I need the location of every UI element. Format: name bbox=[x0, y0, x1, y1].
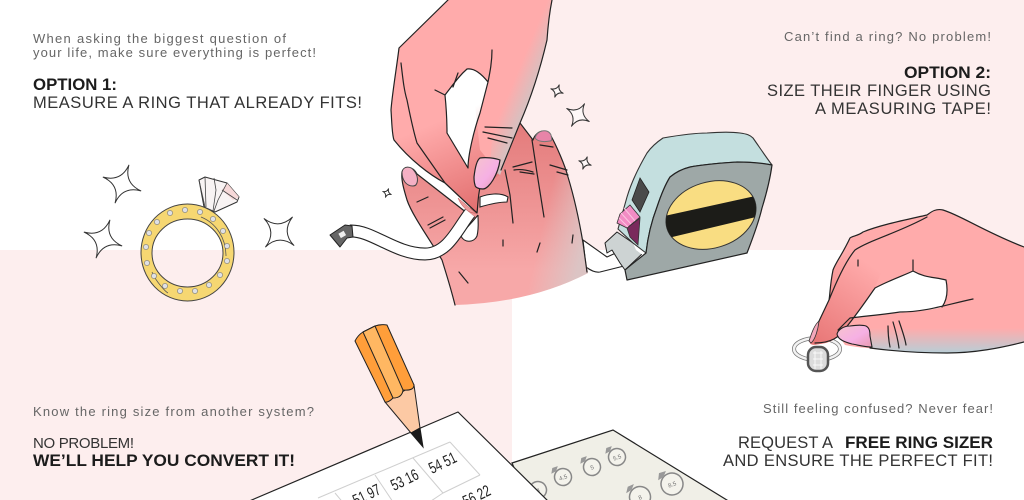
icon: diamond ring with sparkles bbox=[77, 158, 307, 301]
intro text: option 2: Can’t find a ring? No problem! bbox=[784, 29, 991, 44]
tape measure label bbox=[666, 180, 756, 250]
icon: thumb nail bbox=[474, 158, 500, 189]
convert title bbox=[33, 435, 295, 470]
icon: pencil bbox=[355, 325, 423, 447]
heading: option 1 bbox=[33, 31, 362, 112]
option 1 title: MEASURE A RING THAT ALREADY FITS! bbox=[33, 94, 362, 112]
option 2 title: A MEASURING TAPE! bbox=[815, 100, 991, 118]
tape measure white strip bbox=[633, 243, 647, 256]
convert title: WE’LL HELP YOU CONVERT IT! bbox=[33, 452, 295, 470]
intro text: option 1 bbox=[33, 31, 316, 60]
tape measure window bbox=[632, 178, 649, 212]
icon: finger nails bbox=[809, 321, 872, 347]
chart numbers: 54 51 bbox=[425, 448, 460, 477]
icon: tape end between hand and measure bbox=[583, 240, 624, 272]
chart numbers: 53 16 bbox=[387, 465, 422, 494]
hand shape bbox=[810, 210, 1024, 353]
icon: tape measure bbox=[605, 132, 772, 280]
intro text: option 1: When asking the biggest question of bbox=[33, 31, 286, 46]
chart paper bbox=[240, 412, 552, 500]
option 2 title: SIZE THEIR FINGER USING bbox=[767, 82, 991, 100]
icon: index fingernail bbox=[458, 198, 476, 213]
tape measure grey side bbox=[625, 162, 772, 280]
pinky and ring finger nails bbox=[402, 131, 552, 186]
sheet ring sizes: 5.5 bbox=[613, 454, 623, 463]
finger and knuckle creases bbox=[417, 140, 573, 283]
tape lock button bbox=[617, 205, 640, 245]
option 1 title bbox=[33, 76, 362, 112]
sheet paper bbox=[512, 430, 735, 500]
upper hand outline bbox=[391, 0, 552, 213]
ring stones bbox=[143, 207, 230, 294]
intro text: convert: Know the ring size from another system? bbox=[33, 404, 314, 419]
chart grid bbox=[318, 442, 480, 500]
tape ribbon bbox=[350, 194, 508, 254]
chart numbers bbox=[349, 448, 494, 500]
sheet ring sizes: 4 bbox=[536, 488, 542, 495]
icon: sparkles around ring bbox=[77, 158, 307, 265]
heading: convert bbox=[33, 404, 314, 470]
heading: ring sizer bbox=[723, 401, 993, 470]
metal tape tip bbox=[330, 225, 353, 247]
icon: diamond bbox=[199, 177, 239, 212]
illustration: hand with spread fingers bbox=[402, 123, 588, 305]
sheet ring sizes: 5 bbox=[590, 465, 596, 472]
ring sizer title: FREE RING SIZER bbox=[845, 434, 993, 452]
ring sizer title bbox=[723, 434, 993, 470]
option 1 title: OPTION 1: bbox=[33, 76, 117, 94]
option 2 title: OPTION 2: bbox=[904, 64, 991, 82]
upper hand shape bbox=[391, 0, 552, 213]
intro text: option 1: your life, make sure everything is perfect! bbox=[33, 45, 316, 60]
option 2 title bbox=[767, 64, 991, 118]
ring sizer title: REQUEST A bbox=[738, 434, 833, 452]
sheet ring sizes: 8.5 bbox=[668, 481, 678, 490]
intro text: ring sizer: Still feeling confused? Never fear! bbox=[763, 401, 993, 416]
lower hand shape bbox=[402, 123, 588, 305]
icon: ring sizer sheet bbox=[512, 430, 735, 500]
tape measure front nose bbox=[605, 232, 643, 270]
sheet ring sizes: 4.5 bbox=[559, 474, 569, 483]
icon: measuring tape ribbon around finger bbox=[330, 194, 508, 254]
icon: small solitaire ring bbox=[794, 338, 840, 371]
illustration: upper hand pinching tape bbox=[391, 0, 552, 213]
hand outline bbox=[811, 210, 1024, 353]
icon: conversion chart sheet bbox=[240, 412, 552, 500]
tape measure blue top bbox=[618, 132, 772, 253]
ring sizer title: AND ENSURE THE PERFECT FIT! bbox=[723, 452, 993, 470]
convert title: NO PROBLEM! bbox=[33, 435, 134, 452]
icon: gold ring band bbox=[141, 204, 234, 301]
icon: small sparkles around hands bbox=[381, 83, 596, 199]
heading: option 2 bbox=[767, 29, 991, 118]
illustration: hand holding ring bbox=[794, 210, 1024, 371]
sheet ring sizes bbox=[527, 440, 686, 500]
